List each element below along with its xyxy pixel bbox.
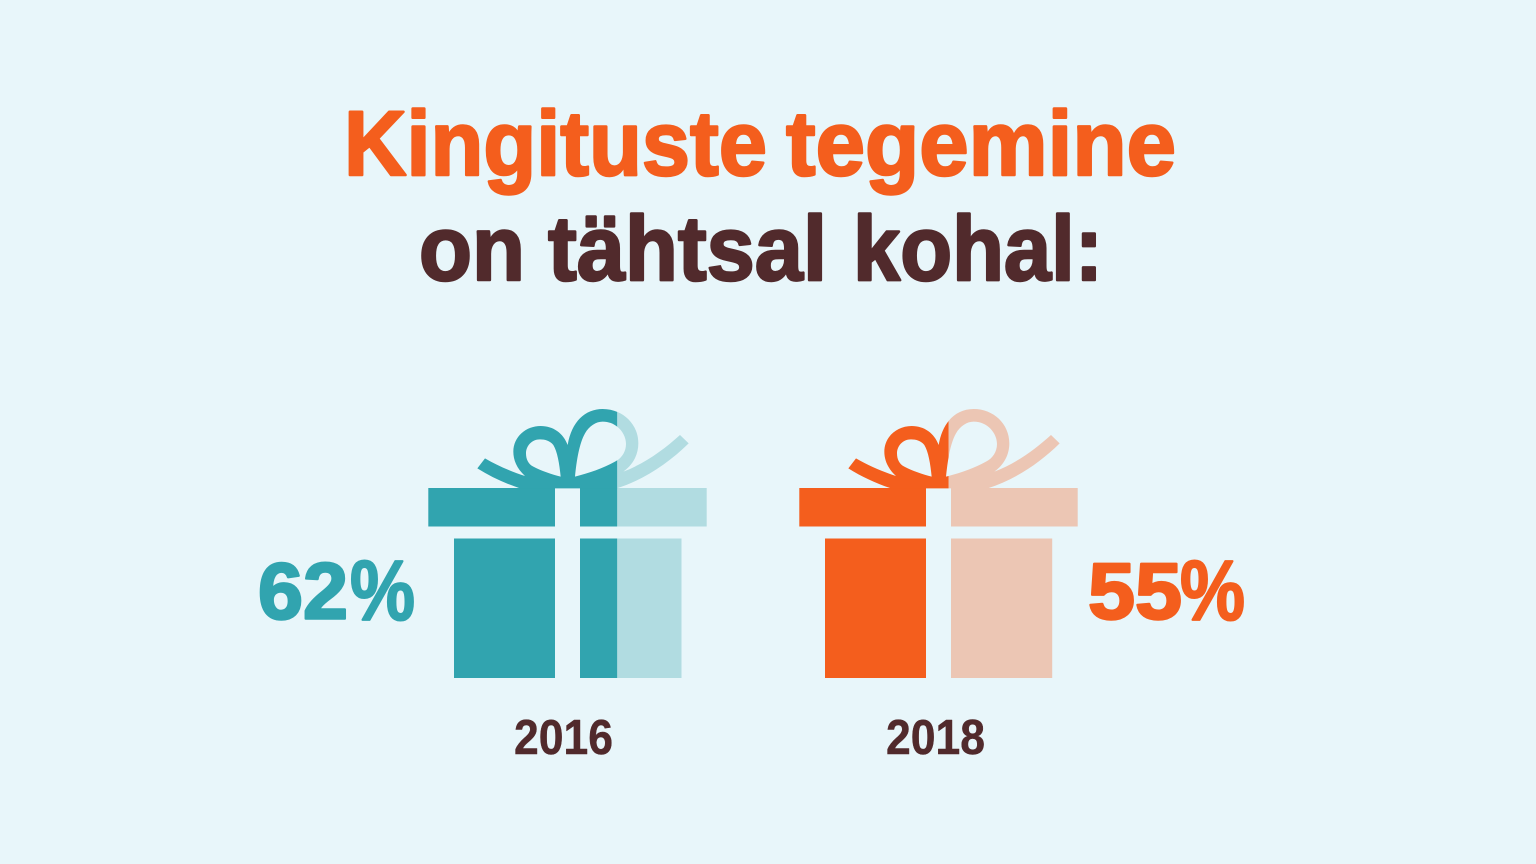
bow light part — [948, 409, 1060, 488]
title line 2: tähtsal — [548, 198, 827, 300]
gift lid right dark — [580, 488, 617, 526]
title line 2: kohal: — [853, 198, 1103, 300]
gift base left — [825, 538, 926, 678]
value 62%: 62 — [258, 546, 348, 636]
value 55% — [1088, 544, 1245, 639]
year 2018: 2018 — [886, 711, 985, 765]
bow dark part — [477, 409, 618, 488]
bow light part — [617, 412, 688, 488]
gift lid right light — [951, 488, 1078, 526]
year 2016: 2016 — [514, 711, 613, 765]
gift base left — [454, 538, 555, 678]
gift base right light — [951, 538, 1052, 678]
gift base right dark — [580, 538, 617, 678]
value 55%: % — [1180, 544, 1245, 639]
value 62% — [258, 544, 415, 639]
title line 1 — [344, 93, 1176, 195]
gift 2016: 62% filled — [428, 409, 707, 678]
gift 2018: 55% filled — [799, 409, 1078, 678]
gift lid left — [799, 488, 926, 526]
title line 1: Kingituste — [344, 93, 767, 195]
gift lid right light — [617, 488, 707, 526]
title line 2: on — [419, 198, 525, 300]
bow dark part — [848, 420, 949, 488]
title line 1: tegemine — [786, 93, 1176, 195]
title line 2 — [419, 198, 1103, 300]
gift lid left — [428, 488, 555, 526]
title — [344, 93, 1176, 300]
gift base right light — [617, 538, 682, 678]
value 62%: % — [350, 544, 415, 639]
value 55%: 55 — [1088, 546, 1182, 636]
